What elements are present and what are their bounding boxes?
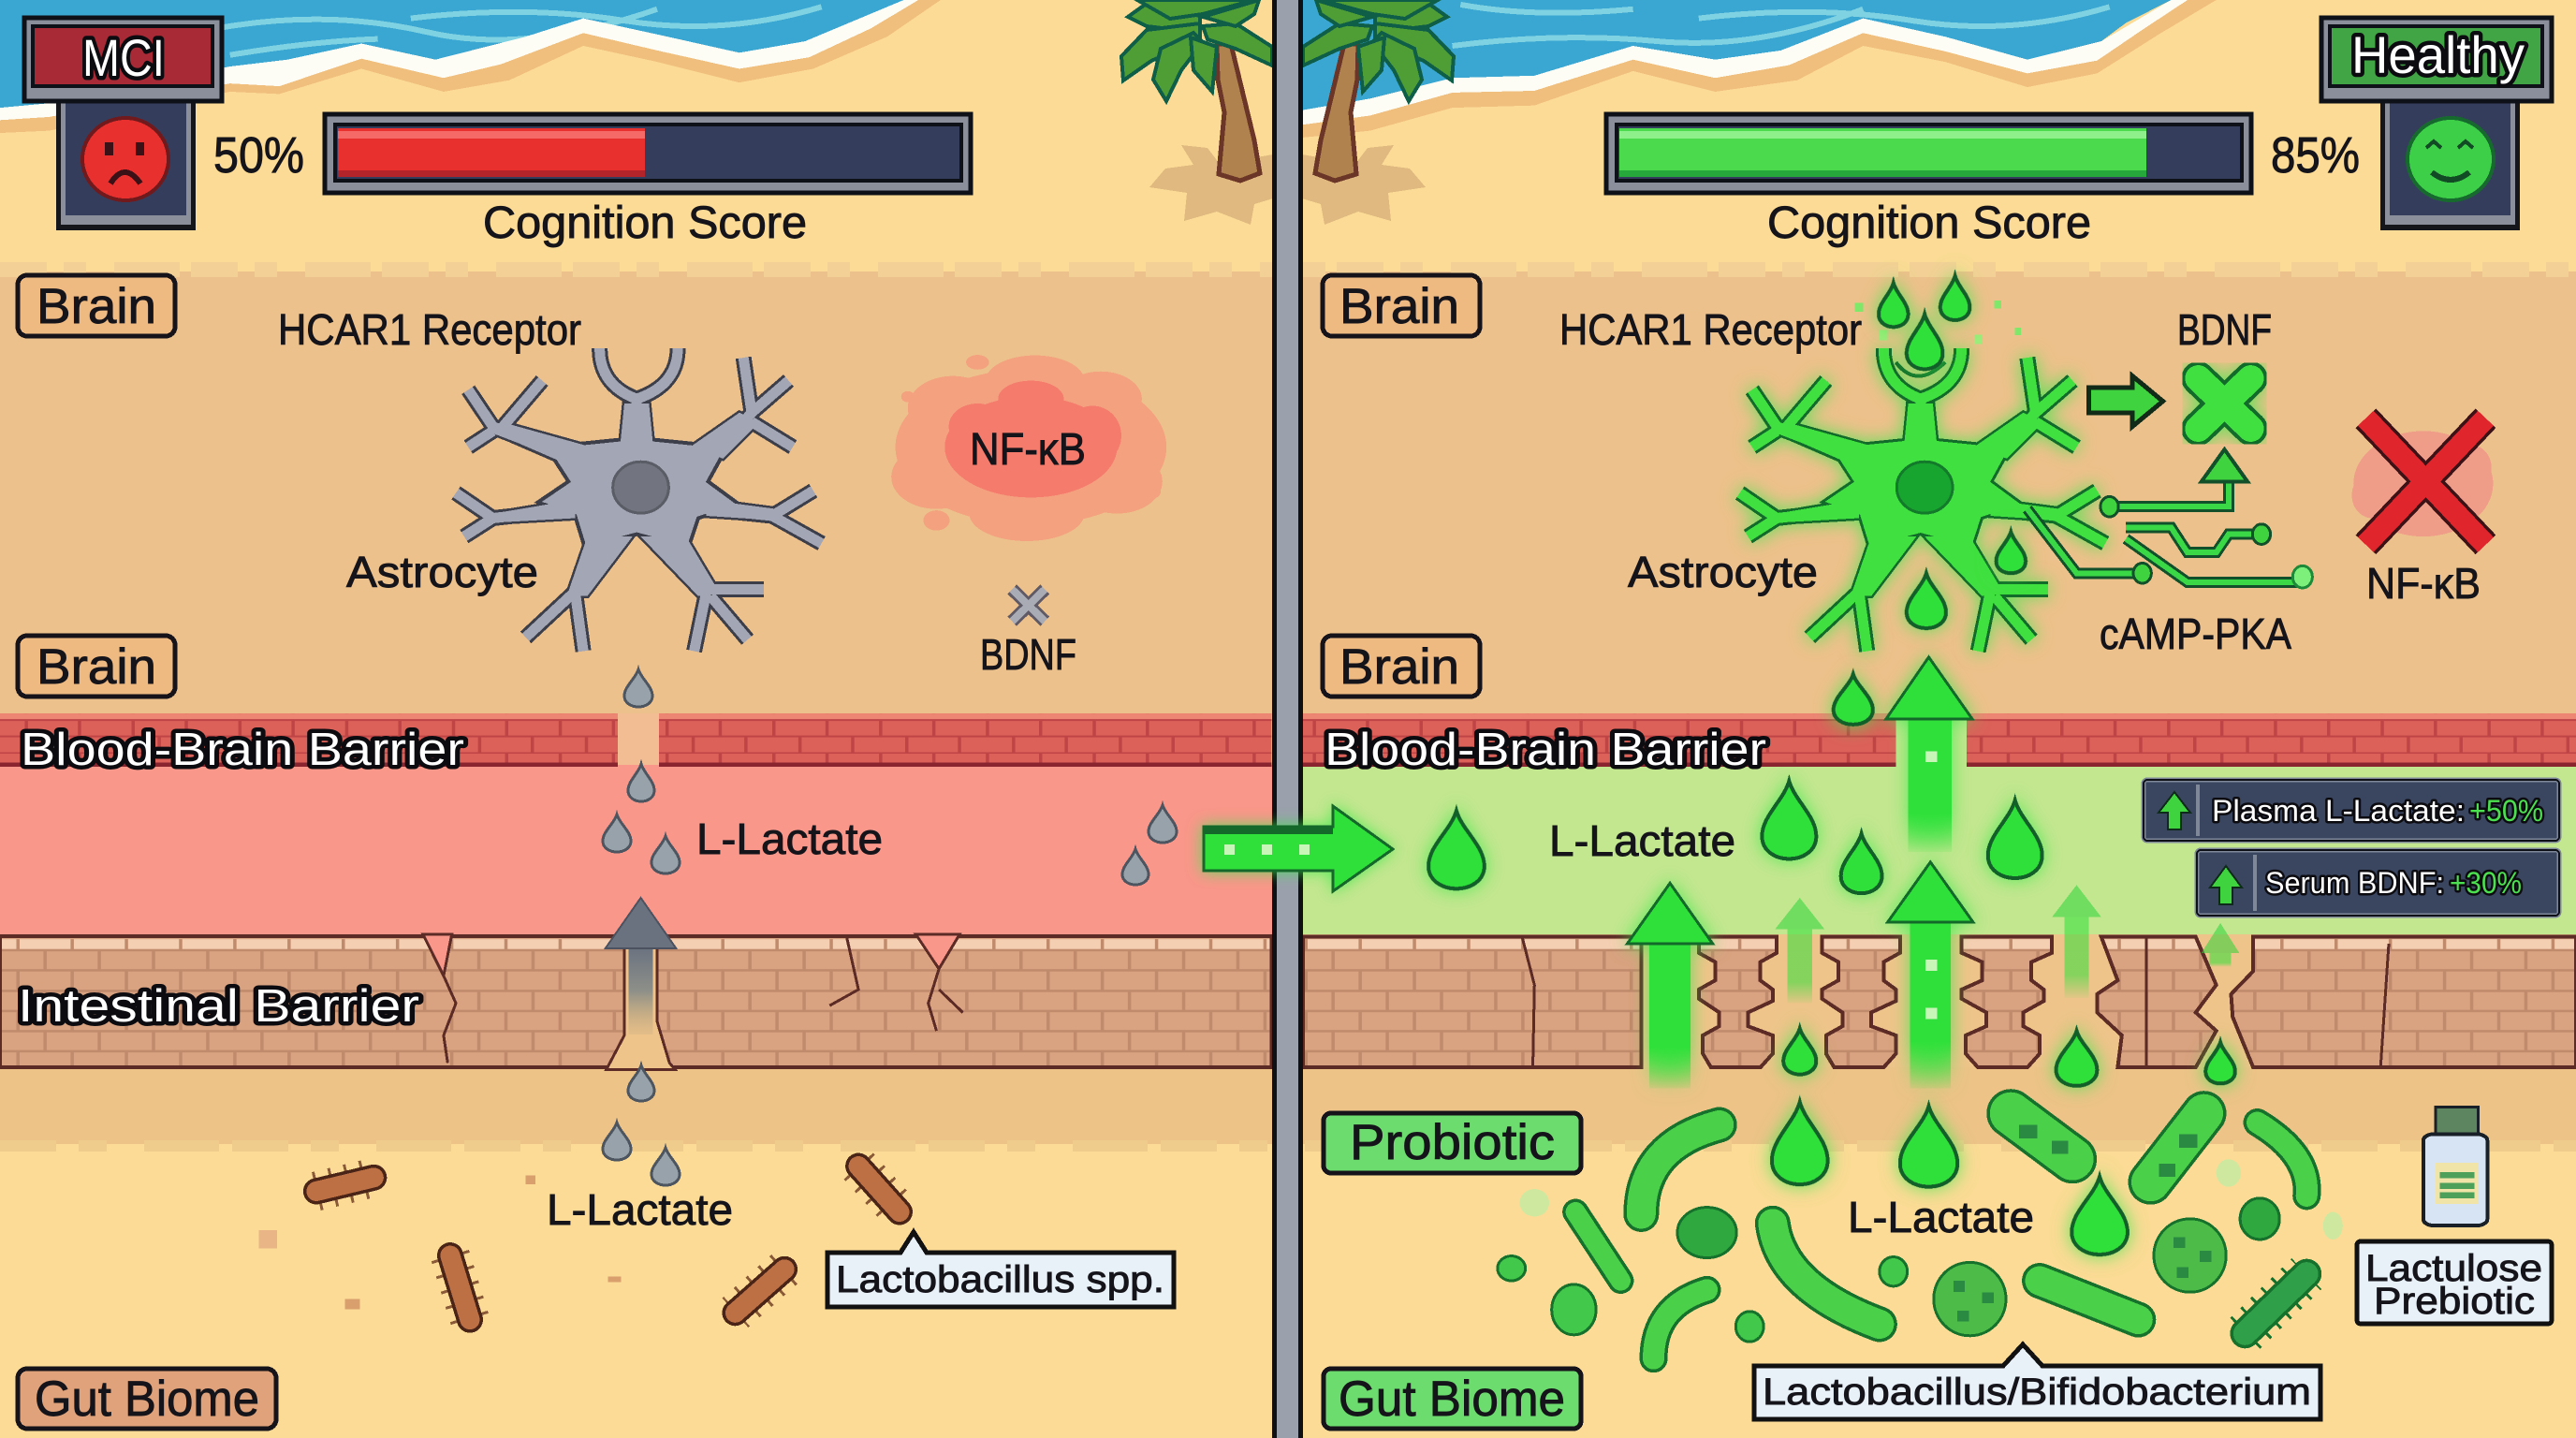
L-Lactate gut left: L-Lactate xyxy=(547,1185,733,1234)
blood-brain barrier left xyxy=(0,713,1272,767)
stat: plasma lactate xyxy=(2144,780,2559,841)
label: brain left 2 xyxy=(18,636,175,697)
MCI header xyxy=(24,18,222,101)
icon: small BDNF xyxy=(1012,589,1045,622)
bold green arrows xyxy=(1627,657,1973,1088)
faint arrows xyxy=(1775,885,2239,1004)
callout: Lactobacillus spp: Lactobacillus spp. xyxy=(836,1259,1164,1300)
MCI header: MCI xyxy=(82,28,165,87)
stat: plasma lactate: Plasma L-Lactate: xyxy=(2212,794,2465,828)
L-Lactate blood right: L-Lactate xyxy=(1549,816,1735,865)
trunk xyxy=(1217,44,1260,181)
astrocyte gray xyxy=(456,348,822,652)
barrier title: BBB right: Blood-Brain Barrier xyxy=(1325,725,1766,775)
blood band right xyxy=(1301,765,2576,935)
green drops in blood and gut xyxy=(1428,781,2235,1255)
green bacteria xyxy=(1498,1113,2343,1358)
stat: plasma lactate: +50% xyxy=(2469,794,2543,828)
callout: lactobacillus/bifidobacterium: Lactobacillus/Bifidobacterium xyxy=(1763,1372,2311,1413)
signal traces cAMP-PKA xyxy=(2027,449,2312,588)
BDNF label left: BDNF xyxy=(980,630,1076,679)
label: brain left 2: Brain xyxy=(37,639,156,695)
gray lactate arrow xyxy=(606,898,676,1034)
label: lactulose prebiotic: Lactulose xyxy=(2365,1248,2542,1289)
arrow to BDNF xyxy=(2089,376,2163,427)
astrocyte label right: Astrocyte xyxy=(1628,548,1818,596)
label: probiotic: Probiotic xyxy=(1350,1115,1555,1170)
label: brain right 1: Brain xyxy=(1339,279,1459,334)
astrocyte label left: Astrocyte xyxy=(346,548,538,596)
cAMP-PKA label: cAMP-PKA xyxy=(2100,609,2291,658)
icon: prebiotic bottle xyxy=(2423,1107,2487,1225)
inhibited NF-kB xyxy=(2351,418,2493,545)
label: lactulose prebiotic xyxy=(2357,1241,2552,1324)
cognition bar xyxy=(1606,114,2251,193)
label: brain right 2 xyxy=(1323,636,1480,697)
healthy header: Healthy xyxy=(2351,25,2525,84)
healthy face panel xyxy=(2380,97,2520,230)
MCI face panel xyxy=(56,97,196,230)
intestinal barrier left xyxy=(0,934,1272,1070)
bar label: Cognition Score xyxy=(1767,198,2091,248)
icon: red X xyxy=(2365,418,2486,545)
barrier title: intestinal left: Intestinal Barrier xyxy=(18,981,419,1032)
background: gut zone band xyxy=(0,1067,2576,1146)
stat: serum BDNF xyxy=(2197,850,2559,916)
brown bacteria xyxy=(258,1167,900,1320)
L-Lactate gut right: L-Lactate xyxy=(1848,1193,2034,1241)
right fronds xyxy=(1303,0,1454,101)
gray lactate drops xyxy=(603,669,1177,1185)
label: gut biome left: Gut Biome xyxy=(35,1372,259,1427)
icon: sad face xyxy=(82,118,168,200)
callout: Lactobacillus spp xyxy=(827,1232,1174,1307)
label: gut biome right: Gut Biome xyxy=(1339,1372,1565,1427)
green drops at receptor and cell xyxy=(1834,276,2026,725)
right trunk xyxy=(1315,44,1358,181)
intestinal barrier right xyxy=(1303,937,2576,1067)
right palm tree xyxy=(1302,0,1454,225)
icon: up arrow xyxy=(2159,792,2190,829)
blood band left xyxy=(0,765,1273,935)
label: brain left 1 xyxy=(18,275,175,336)
fronds xyxy=(1121,0,1272,101)
label: brain left 1: Brain xyxy=(37,279,156,334)
label: brain right 2: Brain xyxy=(1339,639,1459,695)
panel: left MCI xyxy=(24,18,971,248)
bar label: Cognition Score xyxy=(483,198,807,248)
label: probiotic xyxy=(1324,1113,1581,1173)
icon: happy face xyxy=(2408,118,2494,200)
L-Lactate blood left: L-Lactate xyxy=(696,814,883,863)
right palm shadow xyxy=(1302,145,1426,225)
label: lactulose prebiotic: Prebiotic xyxy=(2374,1281,2535,1322)
label: brain right 1 xyxy=(1323,275,1480,336)
stat: serum BDNF: Serum BDNF: xyxy=(2265,866,2444,900)
gut-side fill behind right barrier xyxy=(1301,934,2576,1067)
icon: up arrow xyxy=(2210,866,2242,904)
HCAR1 label left: HCAR1 Receptor xyxy=(278,305,581,354)
NF-kB cloud xyxy=(891,355,1166,541)
icon: green BDNF xyxy=(2198,378,2251,429)
right healthy status xyxy=(1606,18,2552,248)
barrier title: BBB left: Blood-Brain Barrier xyxy=(21,725,464,775)
stat: serum BDNF: +30% xyxy=(2450,866,2522,900)
left palm tree xyxy=(1121,0,1273,225)
background: brain zone band xyxy=(0,270,2576,721)
percent: 85% xyxy=(2271,127,2360,183)
healthy header xyxy=(2321,18,2552,101)
astrocyte green xyxy=(1740,301,2105,652)
NF-kB label: NF-κB xyxy=(970,425,1086,475)
panel divider xyxy=(1272,0,1303,1438)
blood-brain barrier right xyxy=(1303,713,2576,767)
right ocean xyxy=(1303,0,2217,138)
BDNF label right: BDNF xyxy=(2177,305,2272,354)
NF-kB label right: NF-κB xyxy=(2366,559,2481,608)
transition arrow xyxy=(1204,806,1393,891)
left ocean xyxy=(0,0,941,133)
callout: lactobacillus/bifidobacterium xyxy=(1754,1344,2320,1419)
HCAR1 label right: HCAR1 Receptor xyxy=(1559,305,1862,354)
cognition bar xyxy=(325,114,971,193)
palm shadow xyxy=(1149,145,1273,225)
percent: 50% xyxy=(213,127,304,183)
